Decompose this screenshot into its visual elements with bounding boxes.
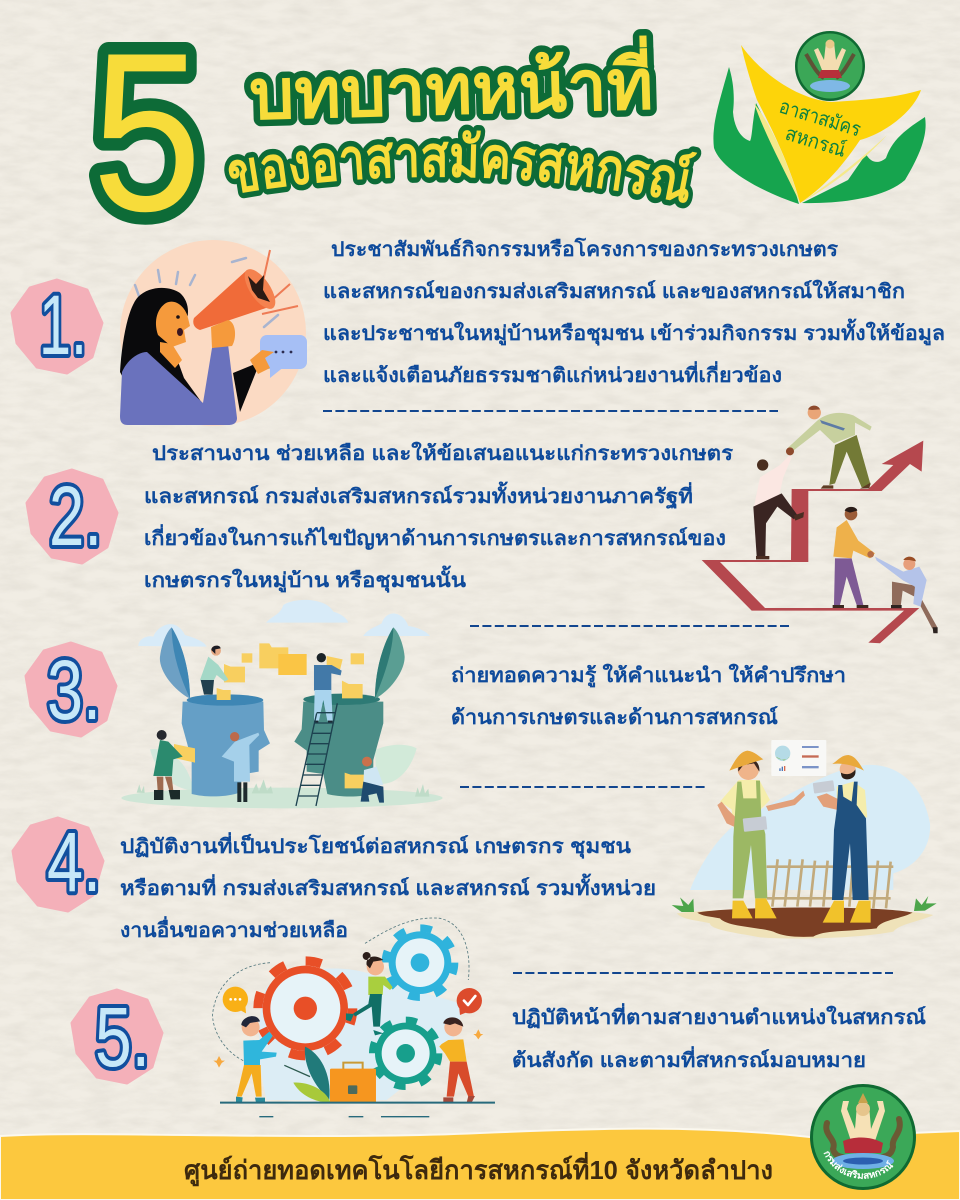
illustration: team with gears <box>213 918 495 1117</box>
title: main heading line 2: ของอาสาสมัครสหกรณ์ <box>224 124 702 208</box>
text block 4 <box>120 831 656 942</box>
grass tufts <box>672 897 694 912</box>
badge: 4: 4. <box>47 815 101 909</box>
boy left <box>243 1032 277 1065</box>
badge: 5: 5. <box>95 990 150 1084</box>
red stairs and arrows <box>702 441 923 643</box>
title: numeral 5: 5 <box>92 5 202 258</box>
left head <box>182 702 270 796</box>
text block 5 <box>512 1002 926 1072</box>
text block 3: ด้านการเกษตรและด้านการสหกรณ์ <box>451 706 778 729</box>
icon: yellow cupped shape <box>741 45 921 203</box>
text block 1: และประชาชนในหมู่บ้านหรือชุมชน เข้าร่วมกิจกรรม รวมทั้งให้ข้อมูล <box>323 318 945 347</box>
illustration: people helping on red stairs <box>702 406 938 643</box>
icon: small department seal <box>795 31 865 101</box>
text block 1 <box>323 237 945 387</box>
text block 1: และสหกรณ์ของกรมส่งเสริมสหกรณ์ และของสหกรณ์ให้สมาชิก <box>323 279 905 303</box>
illustration: two farmers by a fence <box>672 740 937 939</box>
text block 3: ถ่ายทอดความรู้ ให้คำแนะนำ ให้คำปรึกษา <box>451 663 846 689</box>
sky blob <box>690 765 930 890</box>
step 5 <box>72 918 926 1117</box>
girl middle <box>368 977 393 995</box>
badge: 2: 2. <box>49 469 102 563</box>
seal caption: กรมส่งเสริมสหกรณ์ <box>824 1151 894 1180</box>
pale backdrop <box>259 968 460 1100</box>
step 4 <box>13 740 937 942</box>
man farmer <box>837 782 867 817</box>
footer band <box>0 1129 960 1200</box>
text block 4: งานอื่นขอความช่วยเหลือ <box>120 915 348 942</box>
ladder <box>296 703 337 806</box>
text block 2: เกษตรกรในหมู่บ้าน หรือชุมชนนั้น <box>144 565 466 594</box>
briefcase <box>343 1063 363 1069</box>
illustration: sharing knowledge between heads <box>121 600 443 808</box>
third man <box>833 520 875 558</box>
woman in blue <box>222 733 259 782</box>
text block 4: ปฏิบัติงานที่เป็นประโยชน์ต่อสหกรณ์ เกษตรกร ชุมชน <box>120 831 631 859</box>
cloud base <box>832 1153 894 1169</box>
leaves behind <box>150 749 193 790</box>
second man <box>754 455 792 507</box>
step 1 <box>12 237 945 426</box>
ground <box>121 788 443 808</box>
deity figure <box>841 1101 885 1149</box>
text block 1: และแจ้งเตือนภัยธรรมชาติแก่หน่วยงานที่เกี่ยวข้อง <box>323 360 782 387</box>
badge: 3: 3. <box>47 643 101 737</box>
person on left head <box>200 657 228 682</box>
teal gear <box>372 1020 439 1087</box>
top man <box>829 435 871 487</box>
sparkles <box>213 1029 483 1068</box>
department seal <box>810 1084 916 1190</box>
logo wordmark: อาสาสมัคร <box>777 96 864 141</box>
text block 4: หรือตามที่ กรมส่งเสริมสหกรณ์ และสหกรณ์ รวมทั้งหน่วย <box>120 873 656 900</box>
icon: green hands <box>713 67 926 204</box>
text block 2: เกี่ยวข้องในการแก้ไขปัญหาด้านการเกษตรและการสหกรณ์ของ <box>144 523 726 550</box>
text block 1: ประชาสัมพันธ์กิจกรรมหรือโครงการของกระทรวงเกษตร <box>331 237 838 261</box>
step 3 <box>26 600 846 808</box>
red gear <box>258 961 353 1056</box>
step 2 <box>27 406 938 643</box>
illustration: woman with megaphone <box>120 240 307 426</box>
boy right <box>439 1039 467 1062</box>
badge: 4 <box>13 815 103 911</box>
footer text: ศูนย์ถ่ายทอดเทคโนโลยีการสหกรณ์ที่10 จังหวัดลำปาง <box>184 1151 773 1187</box>
floor line <box>220 1103 495 1117</box>
logo wordmark: สหกรณ์ <box>783 122 849 162</box>
logo: volunteer cooperative hands <box>713 31 926 204</box>
logo wordmark <box>777 96 864 162</box>
ground <box>677 909 933 939</box>
dashboard card <box>771 740 826 776</box>
woman in green <box>153 740 183 776</box>
text block 2 <box>144 441 733 594</box>
person on right head <box>314 665 342 691</box>
naga serpents <box>826 1119 900 1157</box>
badge: 1: 1. <box>39 278 87 372</box>
woman farmer <box>720 780 770 831</box>
dashed paths <box>213 918 469 1061</box>
text block 5: ต้นสังกัด และตามที่สหกรณ์มอบหมาย <box>512 1045 866 1072</box>
title: main heading line 1: บทบาทหน้าที่ <box>248 34 654 134</box>
text block 5: ปฏิบัติหน้าที่ตามสายงานตำแหน่งในสหกรณ์ <box>512 1002 926 1029</box>
speech bubbles <box>223 987 248 1012</box>
text block 3 <box>451 663 846 729</box>
leaves <box>305 1047 330 1100</box>
clouds <box>138 600 430 647</box>
badge: 1 <box>12 278 102 373</box>
text block 2: ประสานงาน ช่วยเหลือ และให้ข้อเสนอแนะแก่กระทรวงเกษตร <box>152 441 733 465</box>
fence <box>767 859 893 908</box>
right head <box>294 702 383 796</box>
crouching man <box>363 767 383 787</box>
blue gear <box>385 928 455 997</box>
text block 2: และสหกรณ์ กรมส่งเสริมสหกรณ์รวมทั้งหน่วยงานภาครัฐที่ <box>144 481 693 510</box>
folders <box>174 643 365 788</box>
fourth man <box>892 582 937 629</box>
